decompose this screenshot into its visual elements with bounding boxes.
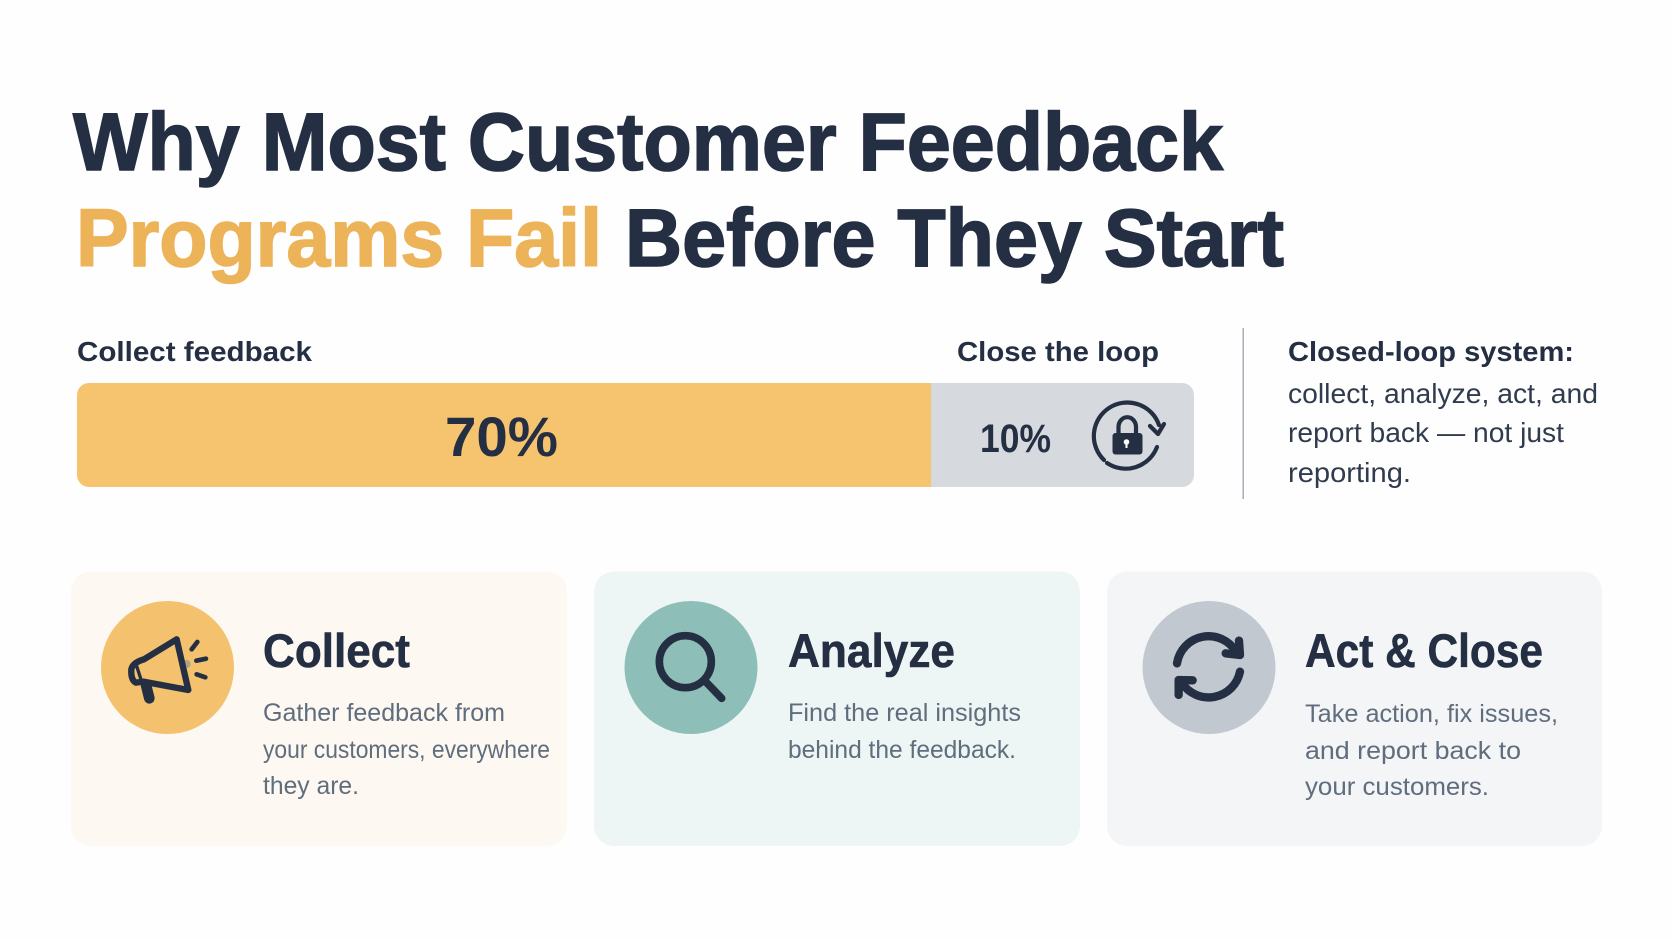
panel: collect xyxy=(71,572,567,846)
panel: act and close xyxy=(1107,572,1602,846)
title xyxy=(73,97,1284,284)
closed-loop description: reporting. xyxy=(1288,457,1411,488)
title: Why Most Customer Feedback xyxy=(73,97,1223,188)
text: act and close description: your customers. xyxy=(1305,773,1489,801)
heading: collect: Collect xyxy=(263,624,410,677)
panel: analyze xyxy=(594,572,1080,846)
icon: megaphone xyxy=(101,601,234,734)
text: collect description: they are. xyxy=(263,772,359,800)
text: analyze description xyxy=(788,699,1021,764)
closed-loop description xyxy=(1288,336,1598,488)
bar labels xyxy=(77,336,1159,367)
title: Programs Fail xyxy=(76,193,602,284)
text: act and close description xyxy=(1305,700,1558,801)
closed-loop description: Closed-loop system: xyxy=(1288,336,1574,367)
progress bar xyxy=(77,383,1194,487)
progress bar: 70% xyxy=(445,405,558,468)
text: act and close description: and report back to xyxy=(1305,737,1521,765)
bar labels: Close the loop xyxy=(957,336,1159,367)
divider xyxy=(1242,328,1244,499)
icon: refresh arrows xyxy=(1142,601,1276,734)
closed-loop description: collect, analyze, act, and xyxy=(1288,378,1598,409)
heading: analyze: Analyze xyxy=(788,624,955,677)
text: collect description: your customers, everywhere xyxy=(263,736,550,764)
text: analyze description: Find the real insights xyxy=(788,699,1021,727)
title: Before They Start xyxy=(625,193,1284,284)
closed-loop description: report back — not just xyxy=(1288,417,1564,448)
icon: magnifying glass xyxy=(624,601,758,734)
bar labels: Collect feedback xyxy=(77,336,312,367)
icon: padlock with circular arrow xyxy=(1094,402,1164,469)
text: collect description xyxy=(263,699,550,800)
text: act and close description: Take action, fix issues, xyxy=(1305,700,1558,728)
progress bar: 10% xyxy=(980,417,1051,461)
text: analyze description: behind the feedback. xyxy=(788,736,1016,764)
text: collect description: Gather feedback from xyxy=(263,699,505,727)
heading: act and close: Act & Close xyxy=(1305,624,1543,677)
